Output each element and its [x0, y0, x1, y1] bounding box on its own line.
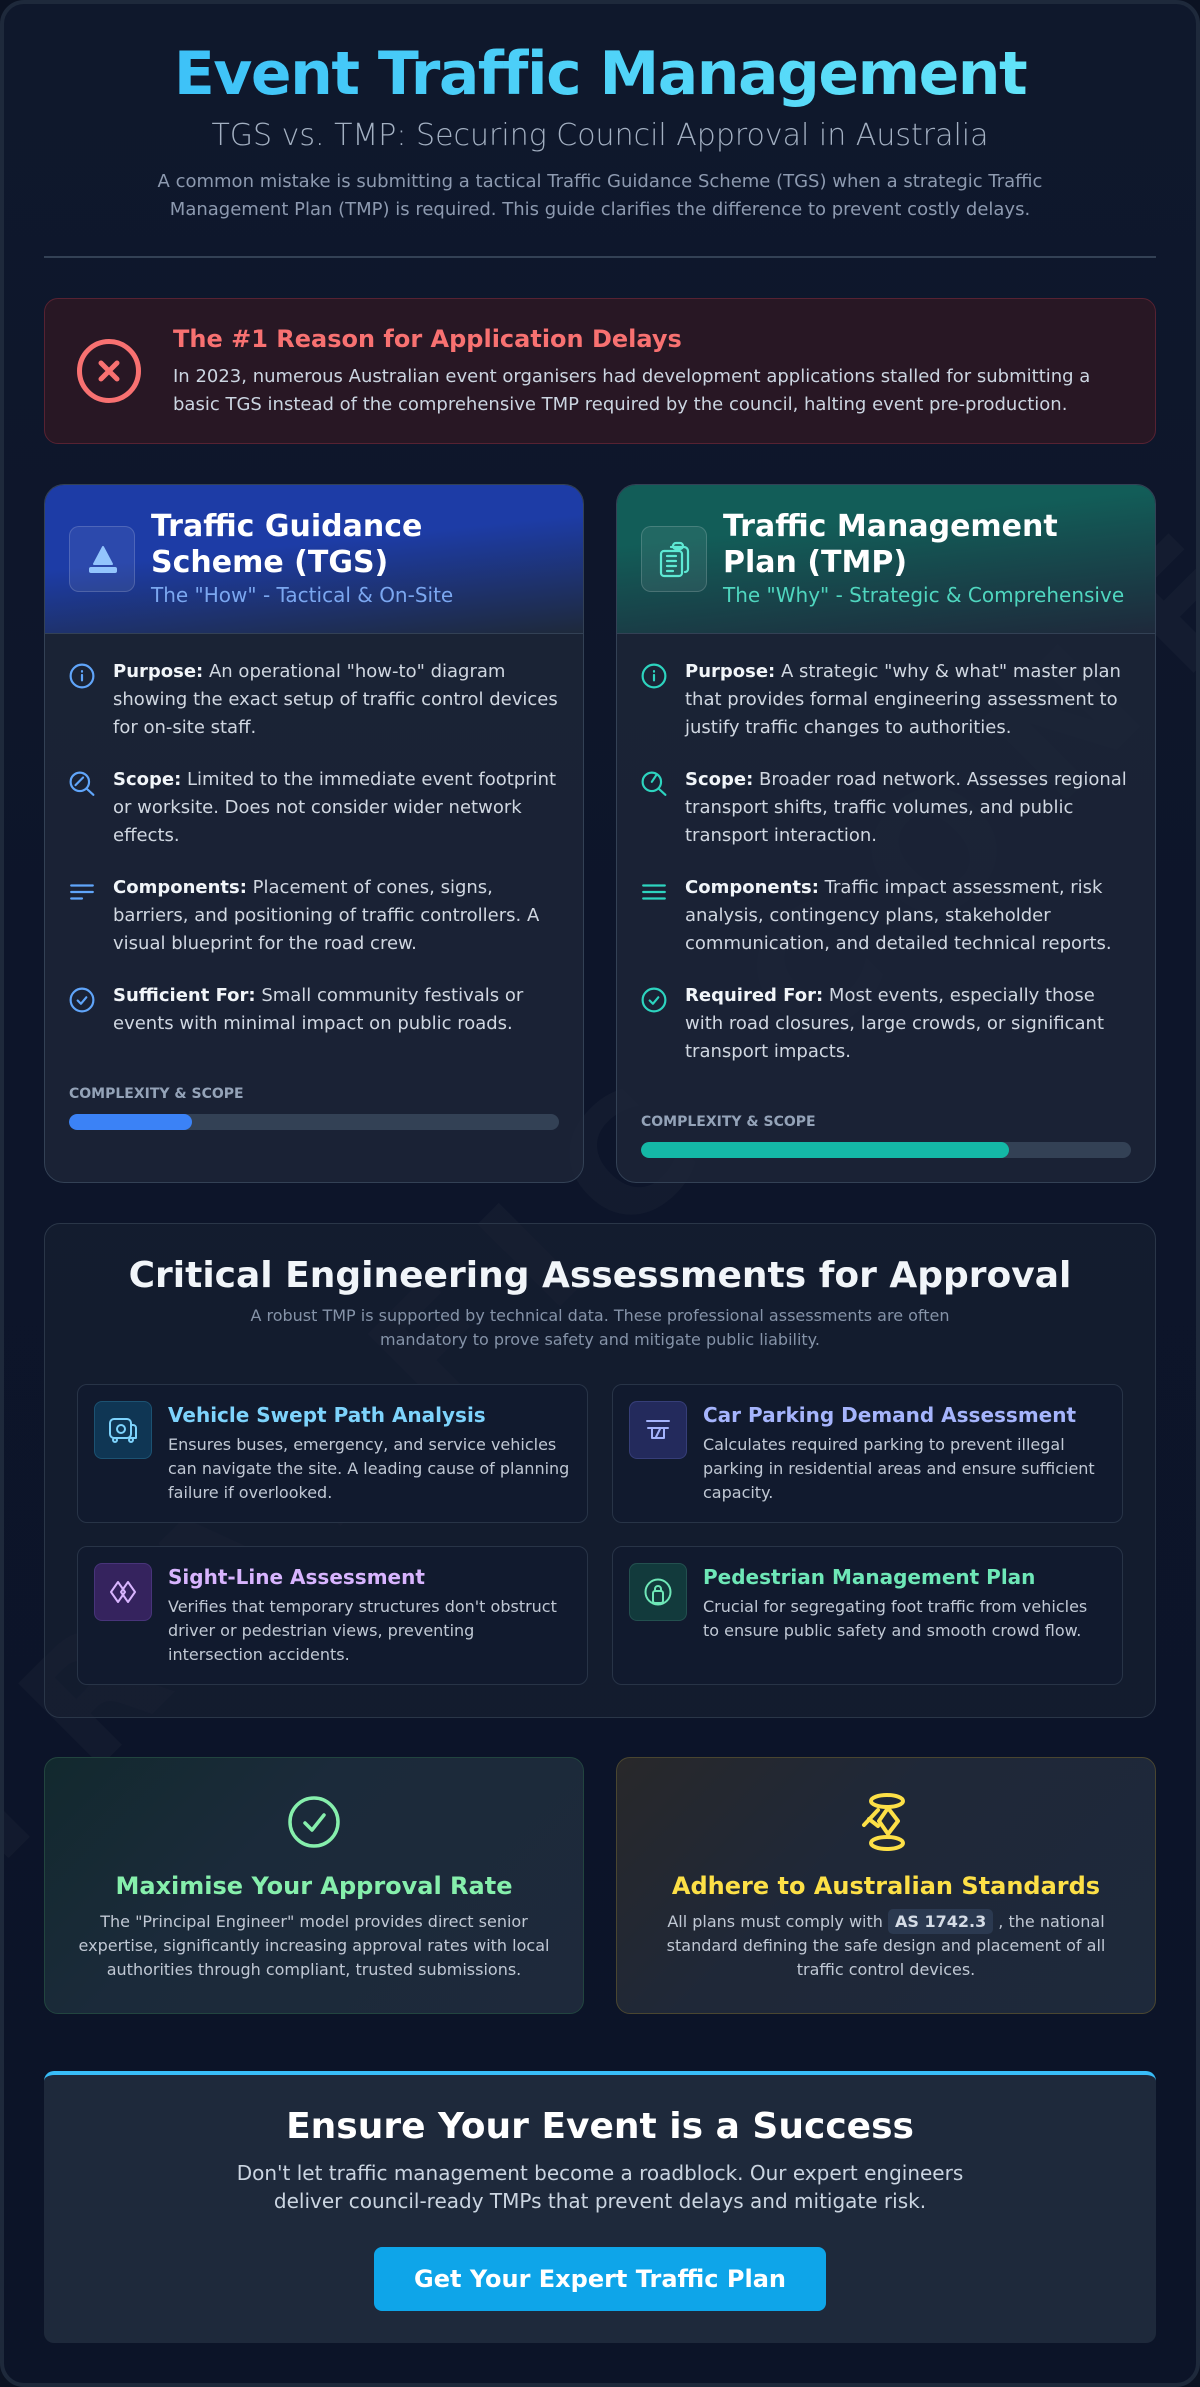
- intro text: A common mistake is submitting a tactical Traffic Guidance Scheme (TGS) when a strategic Traffic: [158, 171, 1042, 192]
- card: sight line: [77, 1546, 588, 1685]
- TGS scope: or worksite. Does not consider wider network: [113, 797, 522, 818]
- TMP subtitle: The "Why" - Strategic & Comprehensive: [723, 583, 1124, 607]
- TMP scope: [642, 769, 1127, 846]
- approval text: authorities through compliant, trusted submissions.: [107, 1960, 521, 1979]
- TMP required for: [642, 985, 1104, 1062]
- TGS subtitle: The "How" - Tactical & On-Site: [151, 583, 453, 607]
- panel: call to action: [44, 2071, 1156, 2343]
- TGS purpose: for on-site staff.: [113, 717, 256, 738]
- sight line title: Sight-Line Assessment: [168, 1565, 425, 1589]
- CTA text: deliver council-ready TMPs that prevent delays and mitigate risk.: [274, 2189, 926, 2213]
- parking title: Car Parking Demand Assessment: [703, 1403, 1076, 1427]
- alert text: [173, 366, 1090, 415]
- card: swept path: [77, 1384, 588, 1523]
- swept path text: failure if overlooked.: [168, 1483, 332, 1502]
- TGS sufficient for: [70, 985, 524, 1034]
- sight line text: intersection accidents.: [168, 1645, 350, 1664]
- card: pedestrian: [612, 1546, 1123, 1685]
- swept path text: can navigate the site. A leading cause of planning: [168, 1459, 569, 1478]
- panel: TMP: [616, 484, 1156, 1183]
- TMP components: communication, and detailed technical reports.: [685, 933, 1112, 954]
- TMP title: Traffic Management: [723, 509, 1058, 544]
- header: [158, 39, 1042, 220]
- TGS complexity bar: [69, 1114, 559, 1130]
- alert heading: The #1 Reason for Application Delays: [173, 325, 682, 353]
- TGS purpose: Purpose: An operational "how-to" diagram: [113, 661, 505, 682]
- standards title: Adhere to Australian Standards: [672, 1872, 1100, 1900]
- TMP purpose: that provides formal engineering assessment to: [685, 689, 1118, 710]
- TGS scope: effects.: [113, 825, 180, 846]
- icon: check circle: [288, 1796, 340, 1848]
- TMP title: Plan (TMP): [723, 545, 907, 580]
- swept path text: Ensures buses, emergency, and service vehicles: [168, 1435, 556, 1454]
- icon: pedestrian: [629, 1563, 687, 1621]
- standards text: standard defining the safe design and placement of all: [667, 1936, 1105, 1955]
- TGS complexity label: COMPLEXITY & SCOPE: [69, 1086, 244, 1102]
- parking text: parking in residential areas and ensure sufficient: [703, 1459, 1095, 1478]
- TMP components: [642, 877, 1112, 954]
- parking text: [703, 1435, 1095, 1502]
- panel: TGS: [44, 484, 584, 1183]
- approval text: [79, 1912, 549, 1979]
- TMP complexity label: COMPLEXITY & SCOPE: [641, 1114, 816, 1130]
- standards text: All plans must comply with AS 1742.3 , the national: [667, 1912, 1105, 1931]
- icon: cone: [69, 526, 135, 592]
- TGS sufficient for: Sufficient For: Small community festivals or: [113, 985, 523, 1006]
- TGS sufficient for: events with minimal impact on public roads.: [113, 1013, 513, 1034]
- parking text: Calculates required parking to prevent illegal: [703, 1435, 1065, 1454]
- TMP scope: transport shifts, traffic volumes, and public: [685, 797, 1073, 818]
- subtitle: TGS vs. TMP: Securing Council Approval in Australia: [211, 118, 989, 153]
- swept path title: Vehicle Swept Path Analysis: [168, 1403, 486, 1427]
- CTA text: [237, 2161, 963, 2213]
- title: Event Traffic Management: [174, 39, 1026, 109]
- panel: assessments: [44, 1223, 1156, 1718]
- TGS purpose: showing the exact setup of traffic control devices: [113, 689, 558, 710]
- standards text: [667, 1909, 1105, 1979]
- TGS title: [151, 509, 422, 580]
- sight line text: driver or pedestrian views, preventing: [168, 1621, 474, 1640]
- TMP components: analysis, contingency plans, stakeholder: [685, 905, 1051, 926]
- pedestrian text: Crucial for segregating foot traffic from vehicles: [703, 1597, 1087, 1616]
- swept path text: [168, 1435, 569, 1502]
- CTA text: Don't let traffic management become a roadblock. Our expert engineers: [237, 2161, 963, 2185]
- pedestrian title: Pedestrian Management Plan: [703, 1565, 1035, 1589]
- alert panel: [44, 298, 1156, 444]
- parking text: capacity.: [703, 1483, 773, 1502]
- TGS title: Traffic Guidance: [151, 509, 422, 544]
- TGS components: barriers, and positioning of traffic controllers. A: [113, 905, 539, 926]
- icon: clipboards: [641, 526, 707, 592]
- TMP title: [723, 509, 1058, 580]
- TMP components: Components: Traffic impact assessment, risk: [685, 877, 1102, 898]
- alert text: In 2023, numerous Australian event organisers had development applications stalled for submitting a: [173, 366, 1090, 387]
- sight line text: Verifies that temporary structures don't obstruct: [168, 1597, 557, 1616]
- CTA heading: Ensure Your Event is a Success: [286, 2106, 914, 2147]
- TMP required for: Required For: Most events, especially those: [685, 985, 1095, 1006]
- pedestrian text: [703, 1597, 1087, 1640]
- TGS purpose: [70, 661, 558, 738]
- TGS scope: [70, 769, 556, 846]
- assessments heading: Critical Engineering Assessments for Approval: [129, 1255, 1071, 1296]
- TGS components: [70, 877, 540, 954]
- TGS scope: Scope: Limited to the immediate event footprint: [113, 769, 556, 790]
- card: parking: [612, 1384, 1123, 1523]
- panel: standards: [616, 1757, 1156, 2014]
- icon: cross in circle: [77, 339, 141, 403]
- icon: standards: [862, 1793, 905, 1851]
- TMP header: [617, 485, 1155, 634]
- TMP scope: Scope: Broader road network. Assesses regional: [685, 769, 1127, 790]
- standards text: traffic control devices.: [797, 1960, 975, 1979]
- approval text: The "Principal Engineer" model provides direct senior: [100, 1912, 528, 1931]
- TMP purpose: justify traffic changes to authorities.: [685, 717, 1011, 738]
- icon: vehicle: [94, 1401, 152, 1459]
- TMP purpose: [642, 661, 1121, 738]
- TMP required for: transport impacts.: [685, 1041, 851, 1062]
- TGS components: Components: Placement of cones, signs,: [113, 877, 493, 898]
- CTA button: Get Your Expert Traffic Plan: [414, 2265, 786, 2293]
- panel: approval rate: [44, 1757, 584, 2014]
- TMP purpose: Purpose: A strategic "why & what" master plan: [685, 661, 1121, 682]
- TMP scope: transport interaction.: [685, 825, 877, 846]
- CTA button: [374, 2247, 826, 2311]
- assessments intro: [250, 1306, 950, 1349]
- TGS components: visual blueprint for the road crew.: [113, 933, 417, 954]
- approval title: Maximise Your Approval Rate: [116, 1872, 512, 1900]
- sight line text: [168, 1597, 557, 1664]
- pedestrian text: to ensure public safety and smooth crowd flow.: [703, 1621, 1081, 1640]
- TGS title: Scheme (TGS): [151, 545, 388, 580]
- approval text: expertise, significantly increasing approval rates with local: [79, 1936, 549, 1955]
- assessments intro: mandatory to prove safety and mitigate public liability.: [380, 1330, 820, 1349]
- icon: parking: [629, 1401, 687, 1459]
- icon: sight line: [94, 1563, 152, 1621]
- TMP required for: with road closures, large crowds, or significant: [685, 1013, 1104, 1034]
- TGS header: [45, 485, 583, 634]
- assessments intro: A robust TMP is supported by technical data. These professional assessments are often: [250, 1306, 950, 1325]
- alert text: basic TGS instead of the comprehensive TMP required by the council, halting event pre-production.: [173, 394, 1067, 415]
- TMP complexity bar: [641, 1142, 1131, 1158]
- intro text: Management Plan (TMP) is required. This guide clarifies the difference to prevent costly delays.: [170, 199, 1030, 220]
- intro text: [158, 171, 1042, 220]
